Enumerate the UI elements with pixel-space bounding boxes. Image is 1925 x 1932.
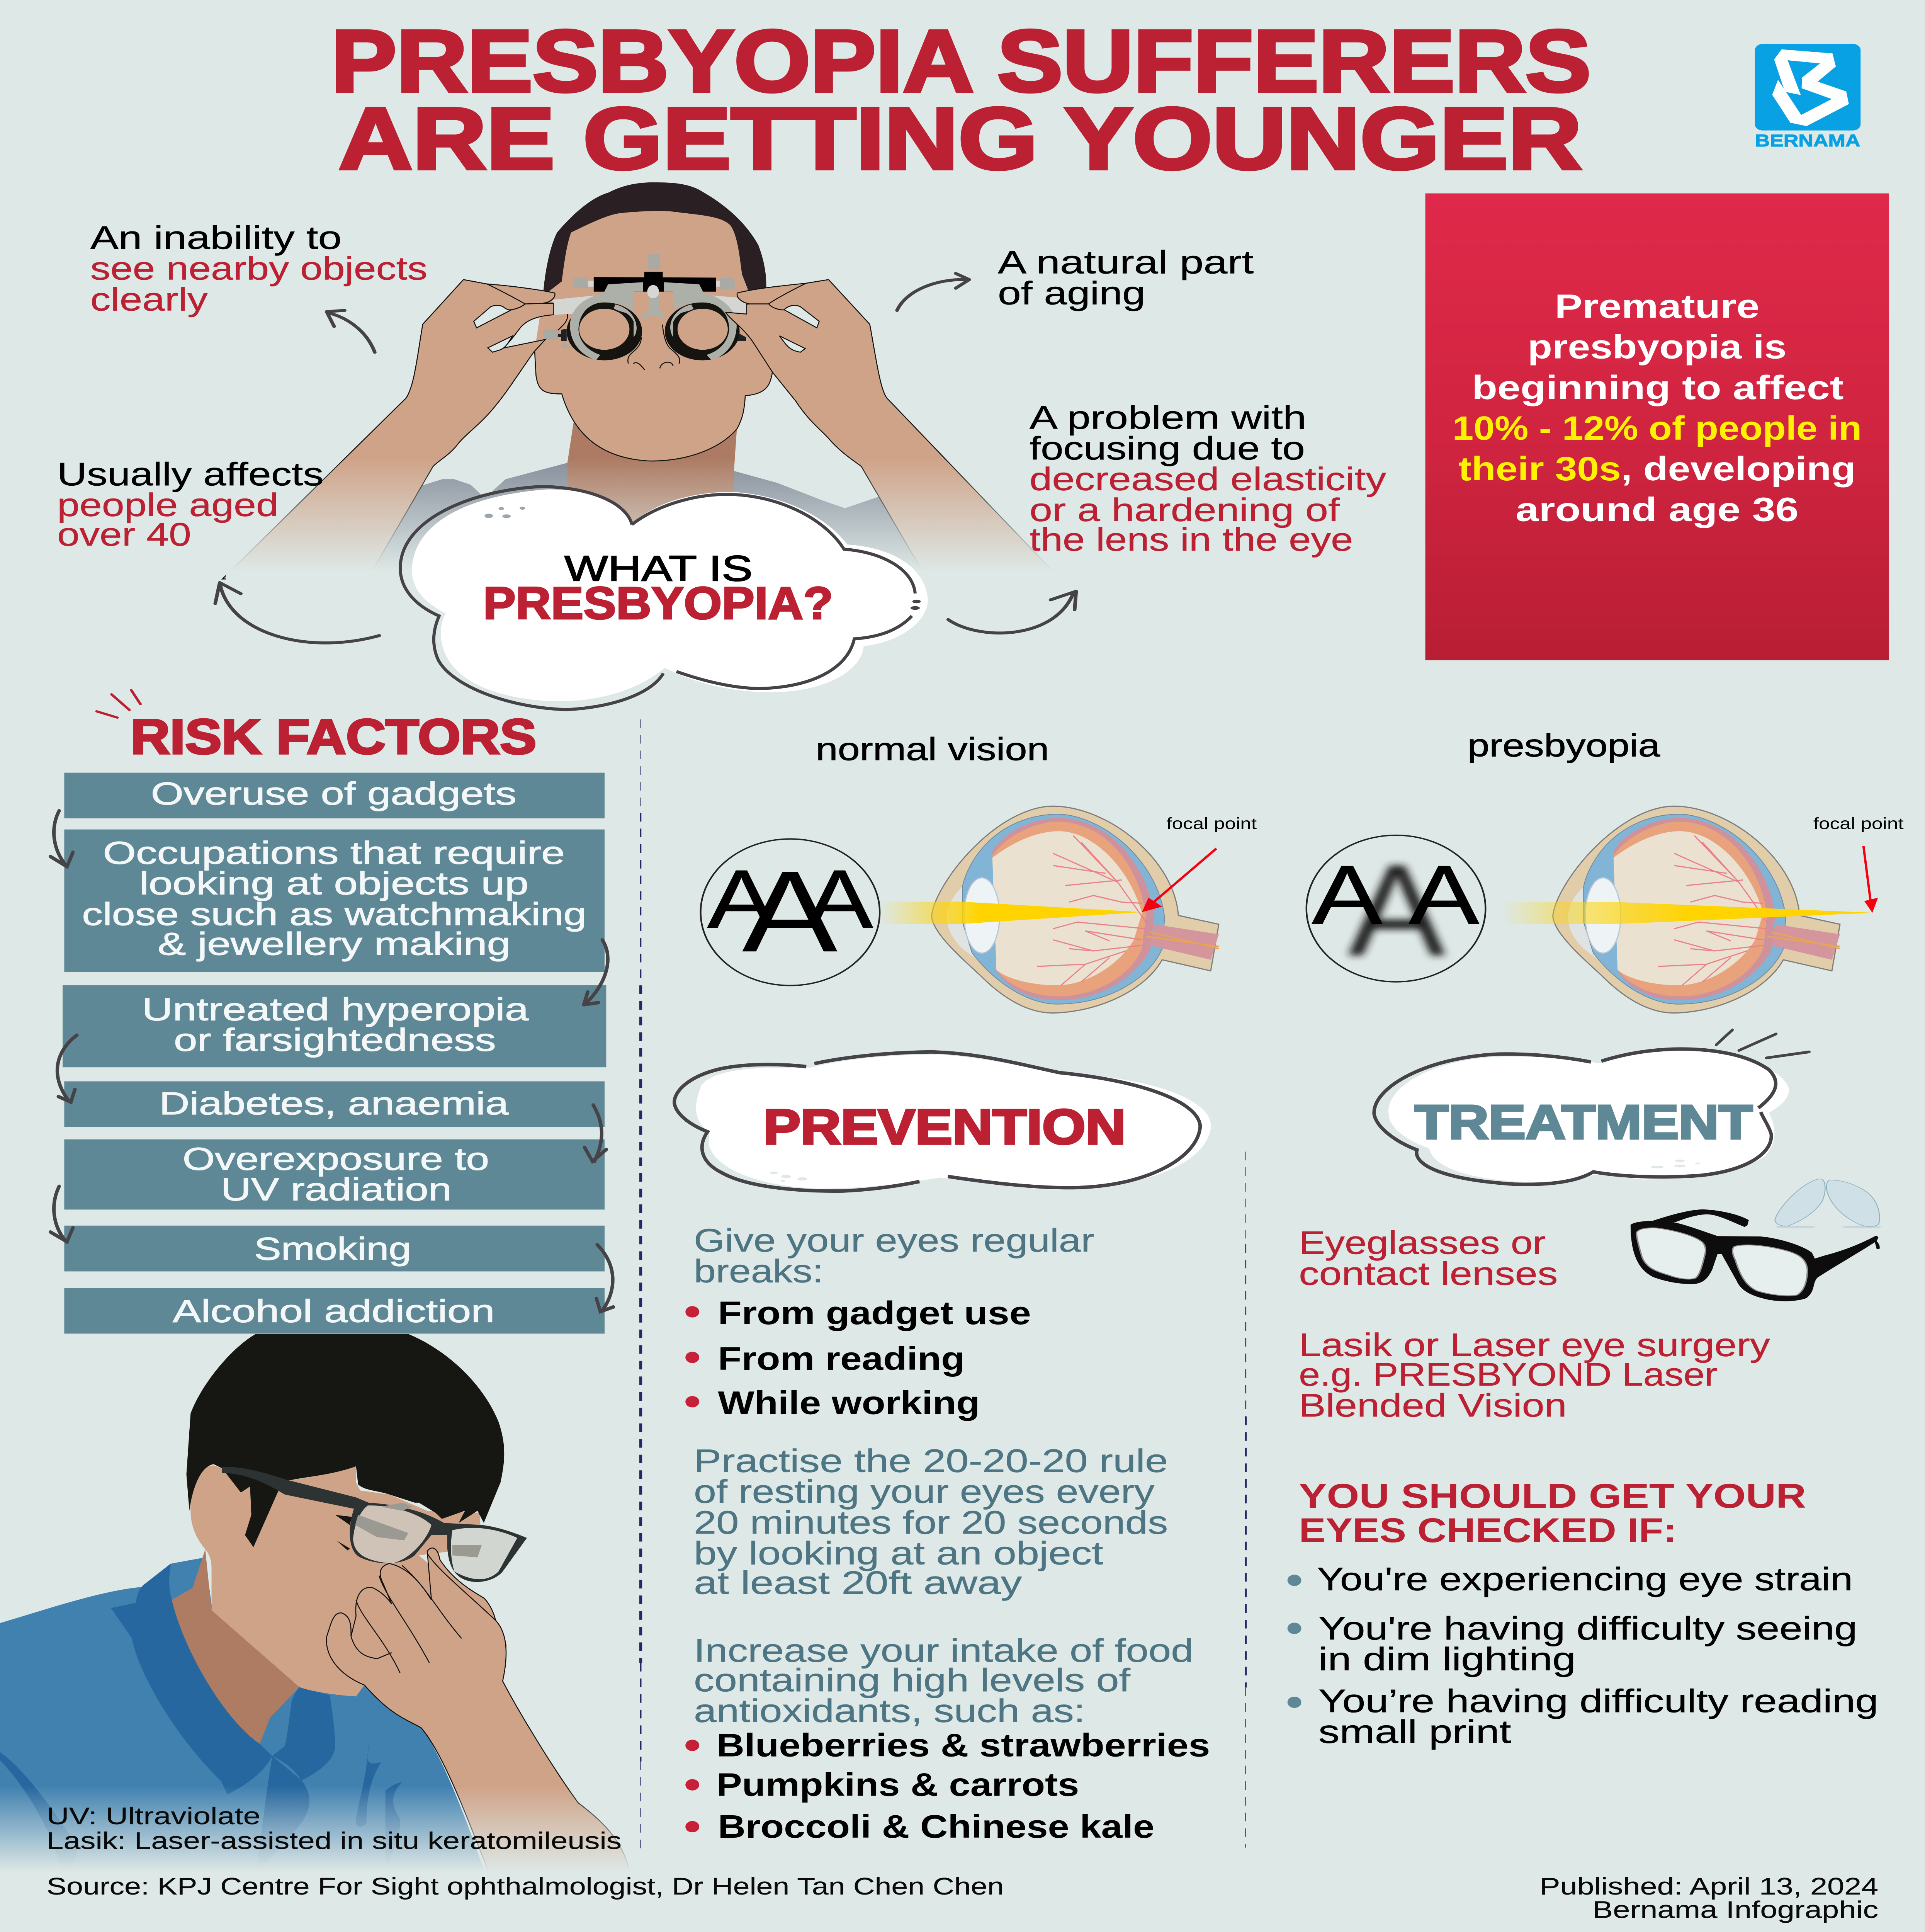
text: antioxidants: containing high levels of [694,1662,1131,1698]
text: abbreviations [47,1803,622,1854]
text: give your eyes regular breaks: Give your eyes regular [694,1222,1094,1259]
diagram: normal vision letters: A [742,847,838,976]
heading: get eyes checked [1299,1477,1806,1550]
callout: inability to see nearby: An inability to [90,219,342,256]
callout: problem with focusing: or a hardening of [1030,492,1340,528]
heading: risk factors [97,690,537,764]
list: risk factors bars: Alcohol addiction [173,1293,495,1329]
callout: usually affects over 40 [57,456,324,553]
list: reasons to get checked: in dim lighting [1318,1641,1576,1677]
text: 20-20-20 rule: of resting your eyes every [694,1473,1154,1510]
callout: natural part of aging [998,244,1254,311]
list: risk factors bars: UV radiation [221,1171,452,1207]
heading: get eyes checked: EYES CHECKED IF: [1299,1511,1677,1550]
diagram: normal vision letters: A [707,853,775,945]
text: lasik surgery: Lasik or Laser eye surgery [1299,1327,1770,1363]
heading: get eyes checked: YOU SHOULD GET YOUR [1299,1477,1806,1515]
text: eyeglasses or contact lenses [1299,1225,1558,1292]
callout: inability to see nearby: clearly [90,281,208,317]
list: reasons to get checked: You're having difficulty seeing [1318,1610,1857,1646]
text: eyeglasses or contact lenses: Eyeglasses or [1299,1225,1546,1261]
cloud: prevention: PREVENTION [763,1100,1126,1155]
heading: presbyopia: presbyopia [1468,727,1660,763]
heading: risk factors: RISK FACTORS [131,709,537,764]
panel: premature presbyopia statistic: beginning to affect [1472,368,1844,406]
list: risk factors bars: looking at objects up [139,865,528,901]
icon: glasses and contact lenses [1631,1179,1882,1301]
text: lasik surgery: Blended Vision [1299,1387,1567,1423]
text: eyeglasses or contact lenses: contact lenses [1299,1255,1558,1292]
diagram: normal vision letters: A [806,853,873,945]
logo: Bernama: BERNAMA [1755,131,1860,150]
title: ARE GETTING YOUNGER [339,90,1582,187]
callout: usually affects over 40: people aged [57,487,279,523]
callout: problem with focusing: the lens in the eye [1030,521,1353,558]
illustration: man rubbing eyes [0,1334,630,1876]
panel: premature presbyopia statistic: , developing [1621,450,1856,488]
list: risk factors bars: Overuse of gadgets [151,776,517,811]
diagram: presbyopia blurred letters [1307,835,1485,983]
callout: problem with focusing: A problem with [1030,399,1307,435]
callout: problem with focusing: decreased elasticity [1030,461,1386,497]
text: abbreviations: Lasik: Laser-assisted in situ keratomileusis [47,1827,622,1854]
cloud: treatment: TREATMENT [1415,1095,1753,1149]
list: reasons to get checked: small print [1318,1714,1511,1750]
list: risk factors bars: close such as watchmaking [82,896,586,932]
callout: usually affects over 40: over 40 [57,516,191,553]
cloud: what is presbyopia: PRESBYOPIA? [483,578,833,629]
text: 20-20-20 rule: Practise the 20-20-20 rule [694,1442,1168,1479]
diagram: normal vision eye [879,806,1219,1013]
text: antioxidants: antioxidants, such as: [694,1692,1085,1729]
list: risk factors bars: & jewellery making [158,926,511,962]
panel: premature presbyopia statistic: presbyopia is [1527,328,1787,366]
title: PRESBYOPIA SUFFERERS [331,12,1591,110]
diagram: presbyopia blurred letters: A [1312,849,1382,942]
text: 20-20-20 rule: by looking at an object [694,1535,1103,1571]
cloud: treatment [1374,1030,1809,1184]
fade under man [226,458,1084,571]
diagram: presbyopia blurred letters: A [1409,849,1479,942]
panel: premature presbyopia statistic: Premature [1555,287,1759,325]
text: 20-20-20 rule [694,1442,1168,1601]
text: lasik surgery [1299,1327,1770,1423]
callout: problem with focusing [1030,399,1386,558]
fade under second man [0,1786,647,1872]
text: lasik surgery: e.g. PRESBYOND Laser [1299,1356,1717,1393]
list: foods: Broccoli & Chinese kale [718,1808,1154,1845]
list: foods [685,1727,1210,1845]
list: reasons to get checked: You’re having difficulty reading [1318,1683,1878,1719]
list: risk factors bars: Smoking [254,1231,411,1267]
callout: natural part of aging: of aging [998,275,1145,311]
arrows around man [215,274,1076,643]
panel: premature presbyopia statistic: around age 36 [1516,490,1799,528]
list: risk factors bars: Overexposure to [183,1141,489,1177]
list: breaks: From reading [718,1340,965,1377]
cloud: prevention [675,1052,1211,1191]
heading: normal vision: normal vision [816,731,1049,767]
text: published [1540,1872,1878,1923]
callout: problem with focusing: focusing due to [1030,430,1305,466]
logo: Bernama [1755,44,1860,150]
list: breaks: From gadget use [718,1295,1031,1331]
text: 20-20-20 rule: 20 minutes for 20 seconds [694,1504,1168,1541]
label: focal point normal: focal point [1166,815,1257,832]
diagram: normal vision letters [701,839,880,986]
list: risk factors bars: Occupations that require [103,835,565,871]
text: antioxidants: Increase your intake of food [694,1632,1194,1668]
list: reasons to get checked [1288,1561,1878,1750]
panel: premature presbyopia statistic [1425,193,1889,660]
text: abbreviations: UV: Ultraviolate [47,1803,260,1830]
diagram: presbyopia blurred letters: A [1348,837,1446,983]
cloud: what is presbyopia: WHAT IS [564,549,753,588]
text: published: Published: April 13, 2024 [1540,1872,1878,1900]
list: breaks [685,1295,1031,1421]
list: risk factors bars: or farsightedness [174,1022,496,1058]
list: risk factors bars [63,773,606,1333]
title [331,12,1591,187]
callout: usually affects over 40: Usually affects [57,456,324,492]
callout: inability to see nearby: see nearby objects [90,250,427,287]
list: reasons to get checked: You're experiencing eye strain [1317,1561,1853,1597]
label: focal point presbyopia: focal point [1813,815,1904,832]
text: give your eyes regular breaks: breaks: [694,1253,823,1289]
callout: natural part of aging: A natural part [998,244,1254,281]
list: breaks: While working [718,1384,980,1421]
panel: premature presbyopia statistic: 10% - 12% of people in [1453,409,1862,447]
text: 20-20-20 rule: at least 20ft away [694,1565,1022,1601]
list: risk factors bars: Diabetes, anaemia [159,1085,509,1121]
text: antioxidants [694,1632,1194,1729]
arrows between risk factors [51,811,613,1311]
cloud: what is presbyopia [400,486,928,709]
list: risk factors bars: Untreated hyperopia [142,992,529,1027]
text: published: Bernama Infographic [1592,1896,1878,1923]
text: give your eyes regular breaks [694,1222,1094,1289]
illustration: man holding trial frame [223,182,1060,579]
text: source: Source: KPJ Centre For Sight ophthalmologist, Dr Helen Tan Chen Chen [47,1872,1004,1900]
callout: inability to see nearby [90,219,427,317]
list: foods: Blueberries & strawberries [717,1727,1210,1764]
list: foods: Pumpkins & carrots [717,1767,1079,1803]
panel: premature presbyopia statistic: their 30s [1458,450,1621,488]
diagram: presbyopia eye [1502,806,1878,1013]
